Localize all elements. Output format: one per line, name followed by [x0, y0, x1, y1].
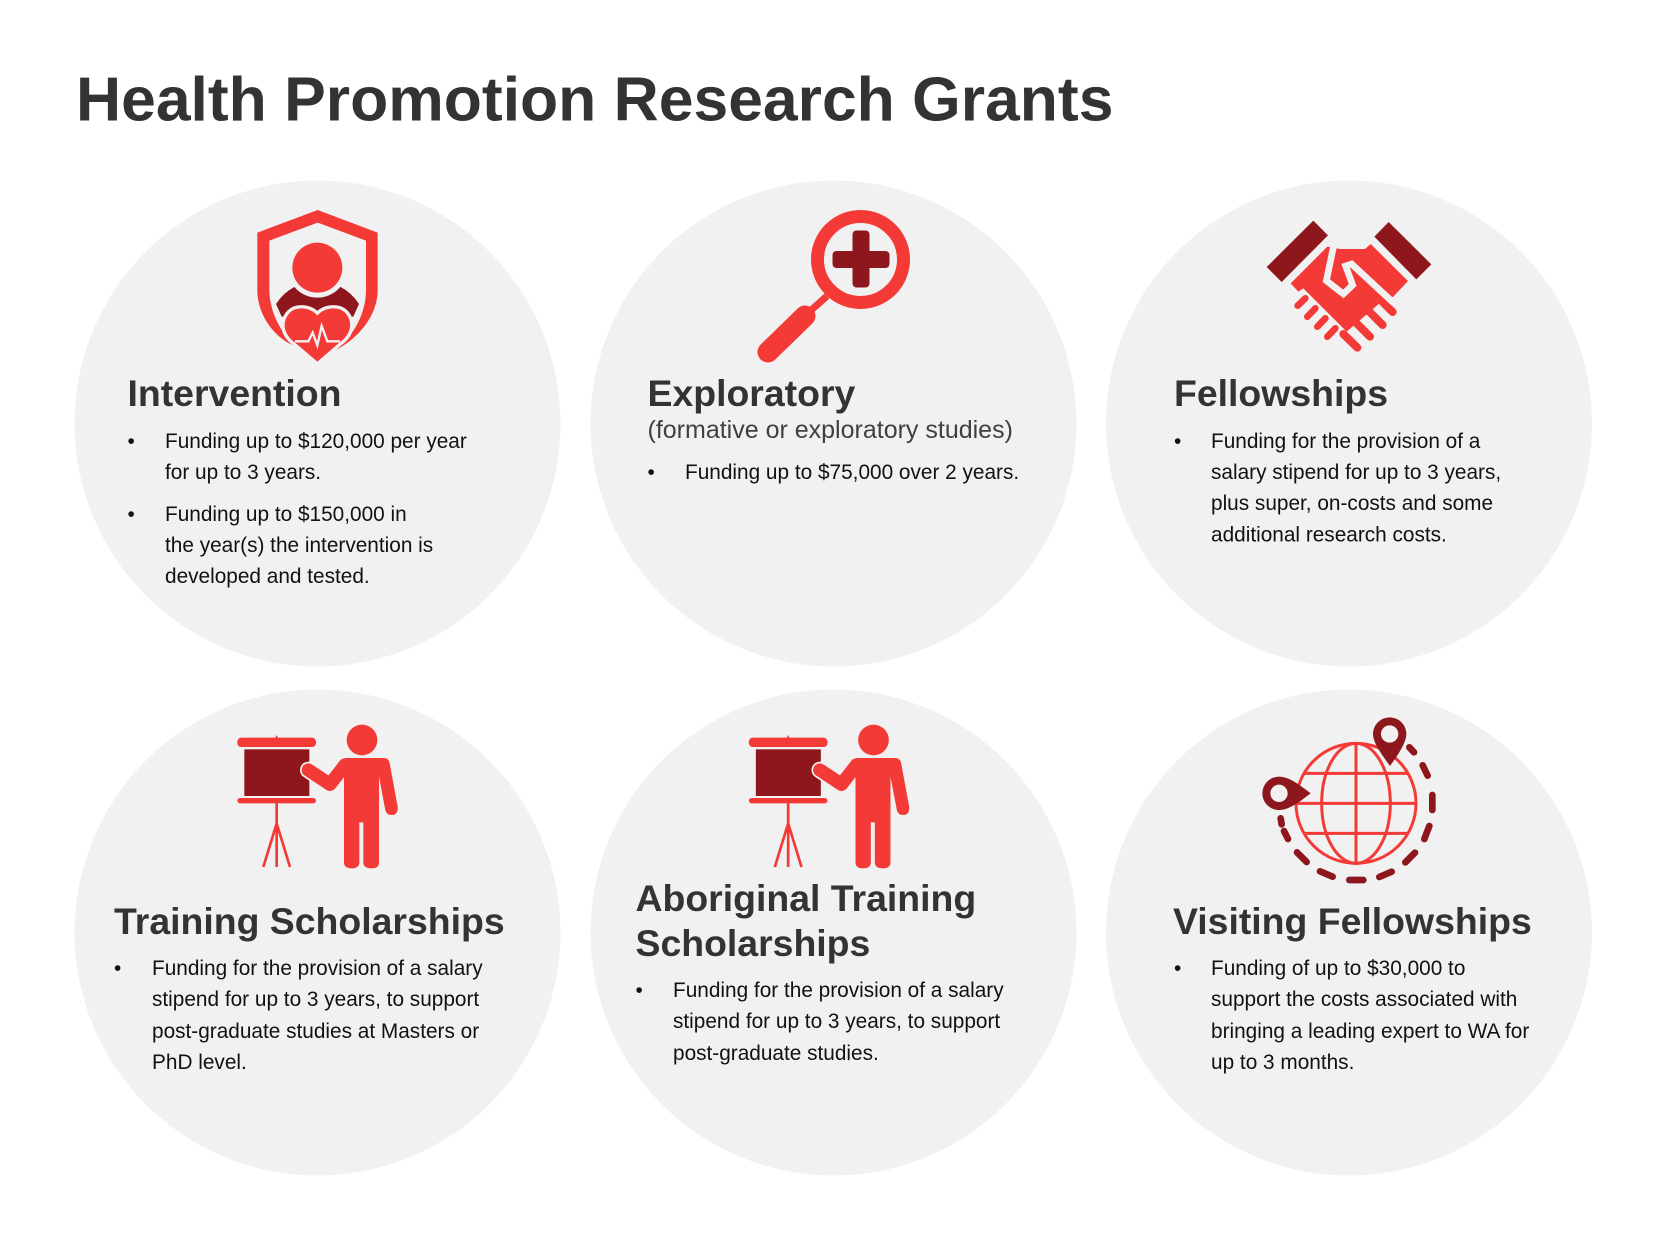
title: Health Promotion Research Grants — [76, 64, 1113, 134]
panel background circle — [74, 690, 560, 1176]
bullet list: support the costs associated with — [1211, 988, 1517, 1011]
icon: presenter at board — [749, 725, 909, 868]
heading: Training Scholarships — [114, 900, 505, 942]
heading: Aboriginal Training — [636, 877, 976, 919]
bullet list: Funding for the provision of a salary — [152, 957, 483, 980]
bullet list: • — [128, 503, 135, 526]
panel background circle — [590, 180, 1076, 666]
bullet list: up to 3 months. — [1211, 1051, 1354, 1074]
icon: globe with location pins — [1262, 717, 1432, 880]
panel background circle — [1106, 690, 1592, 1176]
panel: Aboriginal Training Scholarships — [590, 690, 1076, 1176]
heading: Fellowships — [1174, 372, 1388, 414]
bullet list: PhD level. — [152, 1051, 247, 1074]
bullet list: • — [648, 461, 655, 484]
bullet list: additional research costs. — [1211, 524, 1447, 546]
subheading: (formative or exploratory studies) — [648, 416, 1013, 444]
bullet list — [1174, 957, 1529, 1074]
bullet list: stipend for up to 3 years, to support — [673, 1010, 1000, 1033]
panel: Exploratory — [590, 180, 1076, 666]
bullet list — [636, 979, 1004, 1065]
bullet list — [128, 430, 467, 588]
bullet list: Funding up to $75,000 over 2 years. — [685, 461, 1019, 484]
bullet list: Funding for the provision of a salary — [673, 979, 1004, 1002]
bullet list: Funding of up to $30,000 to — [1211, 957, 1465, 980]
panel background circle — [1106, 180, 1592, 666]
bullet list: • — [1174, 957, 1181, 980]
bullet list: post-graduate studies at Masters or — [152, 1020, 479, 1043]
heading: Intervention — [128, 372, 341, 414]
bullet list: bringing a leading expert to WA for — [1211, 1020, 1529, 1043]
panel: Visiting Fellowships — [1106, 690, 1592, 1176]
panel: Fellowships — [1106, 180, 1592, 666]
heading second line: Scholarships — [636, 922, 870, 964]
bullet list: • — [1174, 430, 1181, 453]
bullet list: • — [128, 430, 135, 453]
icon: magnifying glass with cross — [768, 216, 904, 352]
bullet list: developed and tested. — [165, 565, 370, 588]
icon: shield with person and heart — [257, 210, 378, 362]
bullet list: post-graduate studies. — [673, 1042, 879, 1065]
bullet list: Funding up to $120,000 per year — [165, 430, 467, 453]
icon: presenter at board — [237, 725, 398, 868]
bullet list — [114, 957, 483, 1074]
bullet list: • — [636, 979, 643, 1002]
bullet list — [1174, 430, 1501, 546]
bullet list: salary stipend for up to 3 years, — [1211, 461, 1501, 484]
panel background circle — [590, 690, 1076, 1176]
bullet list: for up to 3 years. — [165, 461, 321, 484]
panel: Training Scholarships — [74, 690, 560, 1176]
heading: Visiting Fellowships — [1173, 900, 1532, 942]
bullet list: • — [114, 957, 121, 980]
panel: Intervention — [74, 180, 560, 666]
bullet list: the year(s) the intervention is — [165, 534, 433, 557]
panel background circle — [74, 180, 560, 666]
bullet list: Funding up to $150,000 in — [165, 503, 407, 526]
icon: handshake — [1267, 221, 1431, 348]
heading: Exploratory — [648, 372, 855, 414]
bullet list: Funding for the provision of a — [1211, 430, 1481, 453]
bullet list: plus super, on-costs and some — [1211, 492, 1493, 515]
bullet list: stipend for up to 3 years, to support — [152, 988, 479, 1011]
